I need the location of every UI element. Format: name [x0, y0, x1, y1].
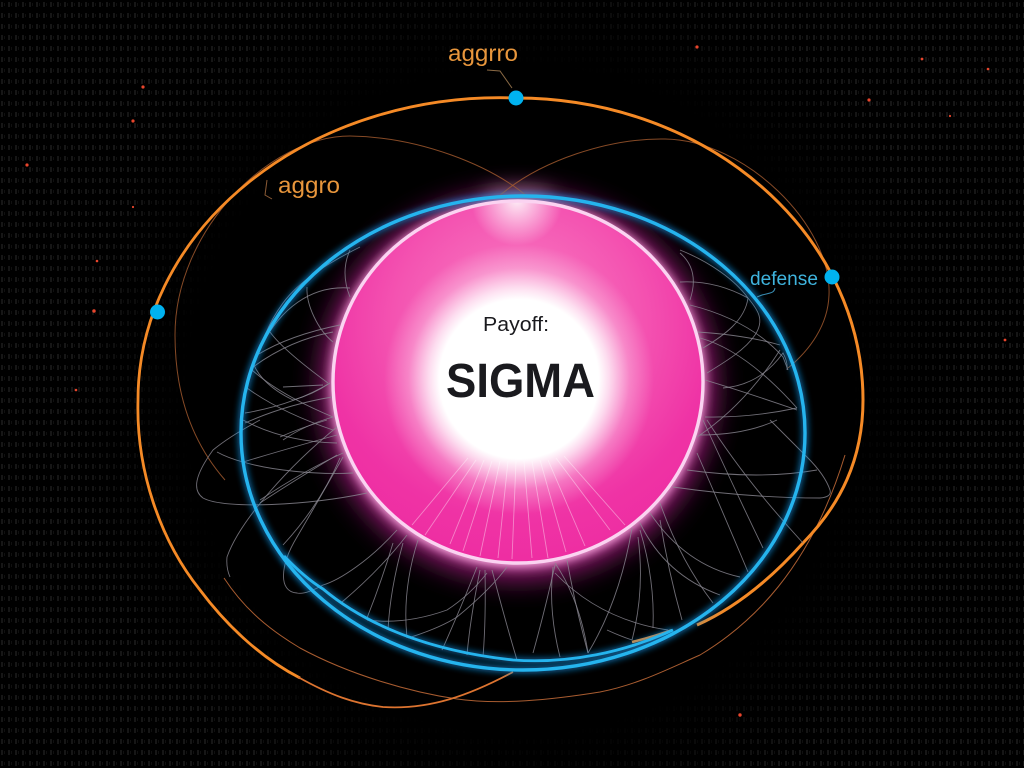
- node: right: [824, 270, 840, 284]
- thick orange orbit: [138, 98, 863, 707]
- white core: [384, 244, 654, 514]
- top highlight: [474, 202, 560, 243]
- pink glow halo: [322, 187, 714, 578]
- upper-left arcs: [262, 288, 350, 345]
- light rays: [412, 456, 625, 559]
- label: defense: defense: [750, 269, 818, 290]
- label: aggrro: [448, 40, 518, 88]
- label: aggro: aggro: [278, 172, 340, 198]
- web of grey orbit lines: [197, 247, 830, 660]
- lower-right loops: [673, 420, 830, 498]
- core rim: [333, 201, 703, 563]
- node: left: [150, 304, 165, 320]
- label: aggrro: aggrro: [448, 40, 518, 66]
- center text: [446, 314, 595, 408]
- node: top: [508, 90, 524, 106]
- pink core sphere: [332, 195, 704, 564]
- thin orange orbit arcs: [175, 136, 845, 702]
- lower-left loops: [197, 420, 367, 505]
- upper-right arcs: [680, 250, 748, 348]
- payoff label: Payoff:: [483, 314, 549, 336]
- sigma label: SIGMA: [446, 355, 595, 408]
- blue orbit outer: [241, 196, 805, 670]
